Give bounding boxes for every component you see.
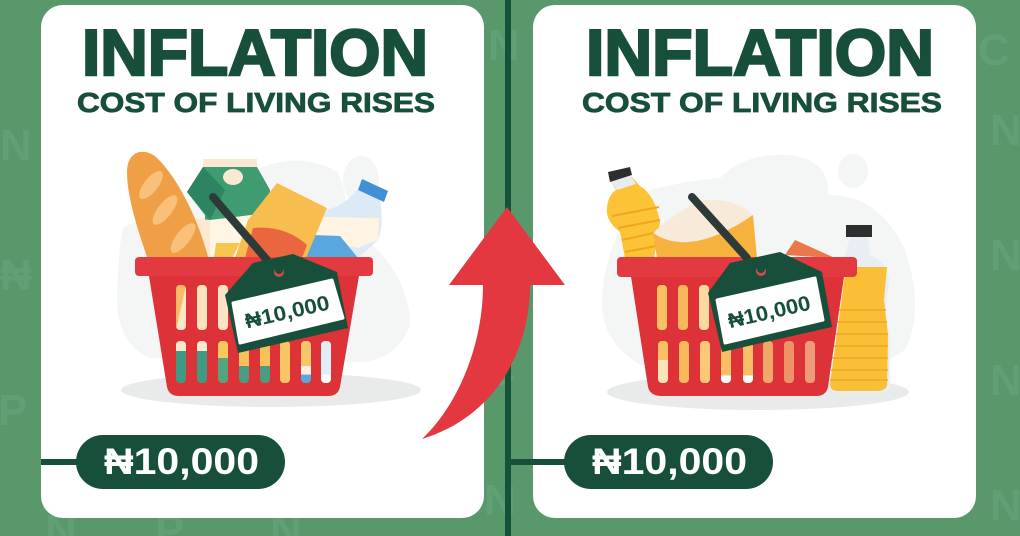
icon: milk carton xyxy=(187,159,270,258)
icon: snack bag xyxy=(214,183,327,258)
basket shadow left xyxy=(121,373,421,407)
icon: bread xyxy=(127,152,208,257)
icon: orange packet xyxy=(785,240,835,258)
icon: water bottle xyxy=(303,179,388,258)
subtitle: cost of living left: COST OF LIVING RISES xyxy=(77,87,435,118)
panel: right after card xyxy=(511,5,976,518)
title: inflation right: INFLATION xyxy=(586,16,934,89)
text: N xyxy=(0,121,32,170)
icon: oil bottle leaning xyxy=(607,167,660,258)
basket shadow right xyxy=(607,374,909,410)
price tag right xyxy=(692,197,832,352)
price pill left: ₦10,000 xyxy=(104,441,259,482)
center divider xyxy=(505,0,511,536)
icon: red basket right xyxy=(617,257,857,396)
background blobs right xyxy=(602,154,915,365)
price pill left xyxy=(76,435,285,489)
price tag right: ₦10,000 xyxy=(726,292,813,333)
price pill right xyxy=(564,435,773,489)
text: ₦ xyxy=(0,251,32,300)
text: C xyxy=(978,26,1010,75)
subtitle: cost of living right: COST OF LIVING RISES xyxy=(582,87,942,118)
icon: oil bottle upright xyxy=(829,225,890,393)
price tag left xyxy=(213,197,348,353)
text: N xyxy=(488,21,520,70)
icon: red basket left xyxy=(135,257,373,396)
icon: rice sack xyxy=(653,200,757,258)
text: C xyxy=(484,346,516,395)
price tag left: ₦10,000 xyxy=(243,292,332,333)
panel: left before card xyxy=(41,5,484,518)
title: inflation left: INFLATION xyxy=(82,16,428,89)
background blobs left xyxy=(117,156,410,362)
text: N xyxy=(484,476,516,525)
price pill right: ₦10,000 xyxy=(592,441,747,482)
arrow: rising red arrow xyxy=(422,207,565,439)
price line left xyxy=(41,459,77,465)
price line right xyxy=(511,459,566,465)
